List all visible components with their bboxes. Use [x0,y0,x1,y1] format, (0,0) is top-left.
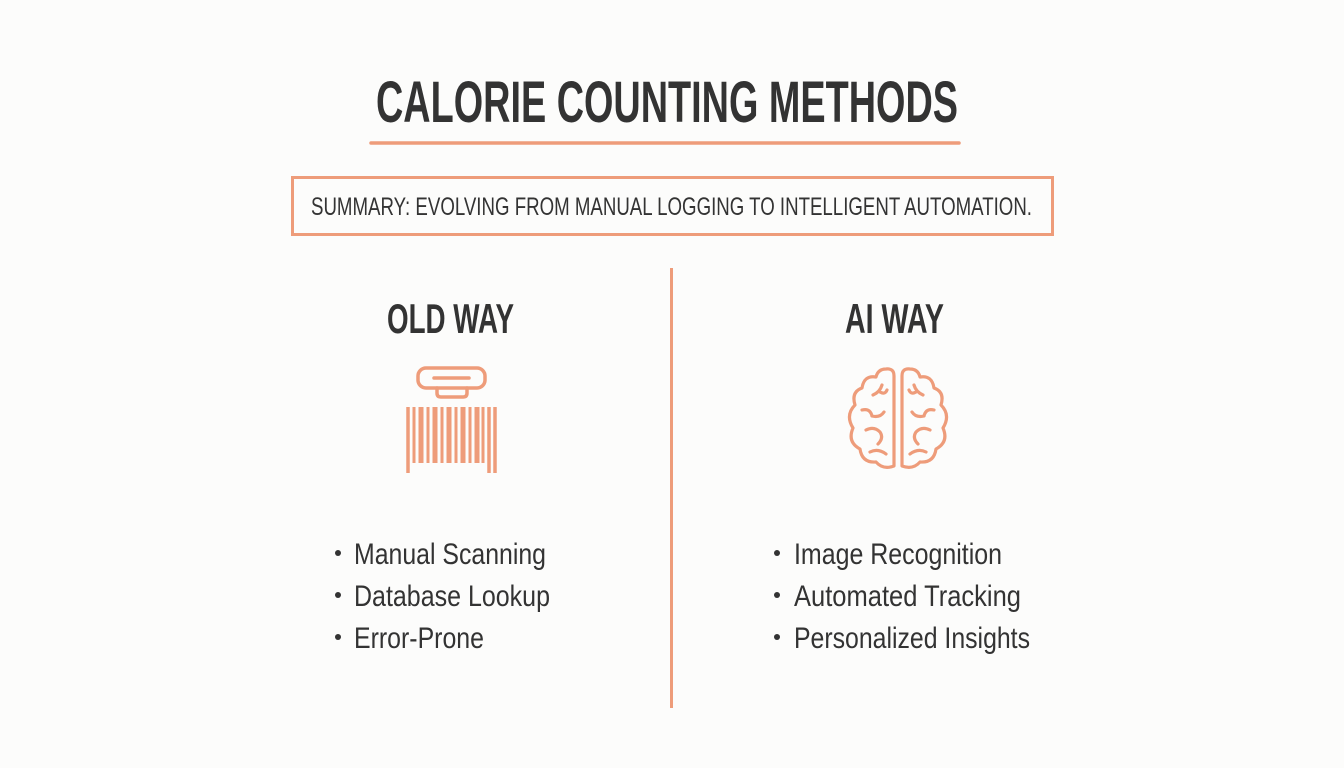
heading: old way: OLD WAY [387,295,514,342]
heading: ai way: AI WAY [845,295,944,342]
divider [670,268,673,708]
icon: brain [849,369,947,467]
bullet list: old way: Manual Scanning [354,538,546,571]
bullet list: old way: Database Lookup [354,580,550,613]
icon: barcode scanner [408,368,495,473]
summary box [292,178,1052,234]
bullet list: old way [335,538,550,655]
bullet list: ai way: Automated Tracking [794,580,1021,613]
title: CALORIE COUNTING METHODS [376,70,958,135]
bullet list: ai way: Image Recognition [794,538,1002,571]
panel: ai way [774,295,1030,655]
summary box: SUMMARY: EVOLVING FROM MANUAL LOGGING TO INTELLIGENT AUTOMATION. [311,193,1032,221]
bullet list: ai way: Personalized Insights [794,622,1030,655]
bullet list: old way: Error-Prone [354,622,484,655]
panel: old way [335,295,550,655]
bullet list: ai way [774,538,1030,655]
